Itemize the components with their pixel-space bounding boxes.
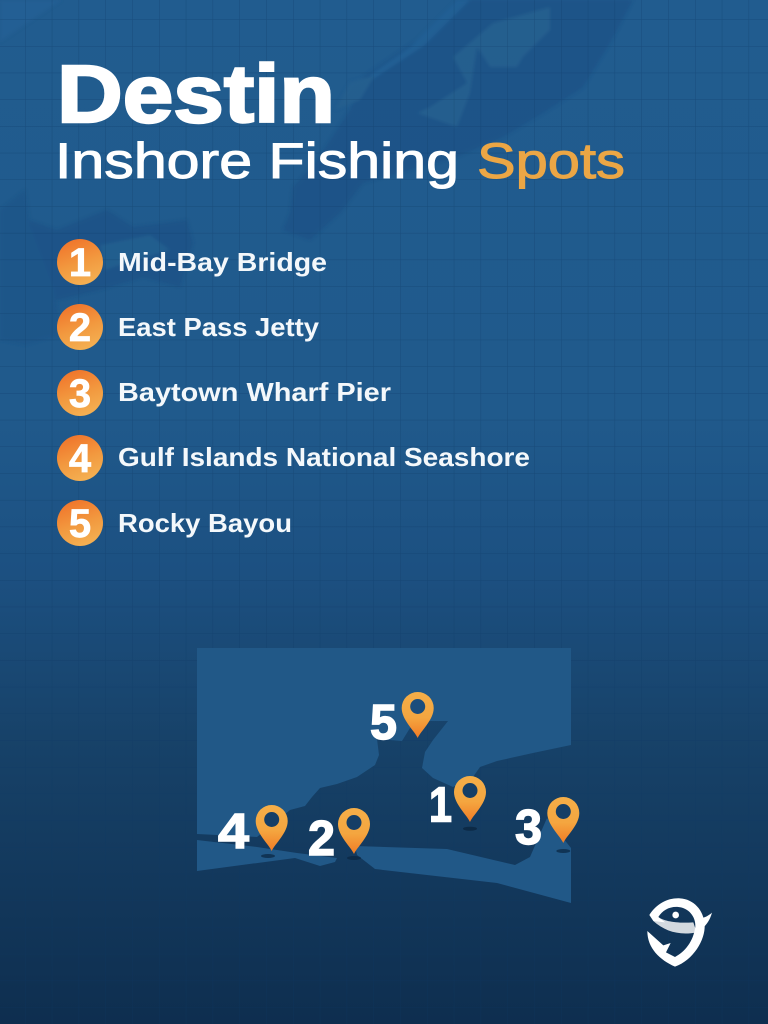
list item 4: 4 [69, 437, 92, 481]
map marker 2 [308, 808, 370, 866]
map of Destin area [197, 648, 571, 903]
list item 3: 3 [69, 372, 91, 416]
icon: fish and hook logo [647, 898, 712, 967]
western barrier island [197, 840, 337, 871]
background map texture [0, 0, 633, 345]
list item 2: East Pass Jetty [118, 312, 320, 342]
title: Spots [477, 133, 625, 189]
list item 2: 2 [69, 306, 91, 350]
list item 5: Rocky Bayou [118, 508, 292, 538]
map marker 5 [370, 692, 434, 750]
list item 5 [57, 500, 292, 546]
list item 1: 1 [69, 241, 91, 285]
map marker 1: 1 [429, 779, 452, 833]
list item 3 [57, 370, 391, 416]
map marker 3 [515, 797, 579, 855]
map marker 4 [218, 805, 288, 859]
map marker 2: 2 [308, 812, 335, 866]
map marker 1 [429, 776, 486, 833]
title [55, 49, 625, 189]
map marker 3: 3 [515, 801, 542, 855]
list item 3: Baytown Wharf Pier [118, 377, 391, 407]
list item 1 [57, 239, 327, 285]
map marker 4: 4 [218, 805, 249, 859]
list item 5: 5 [69, 502, 91, 546]
title: Inshore Fishing [55, 133, 459, 189]
list item 4 [57, 435, 530, 481]
list of fishing spots [57, 239, 530, 546]
list item 2 [57, 304, 320, 350]
eastern barrier island [355, 818, 571, 903]
map marker 5: 5 [370, 696, 397, 750]
mainland [197, 648, 571, 837]
title: Destin [57, 49, 335, 140]
list item 1: Mid-Bay Bridge [118, 247, 327, 277]
list item 4: Gulf Islands National Seashore [118, 442, 530, 472]
